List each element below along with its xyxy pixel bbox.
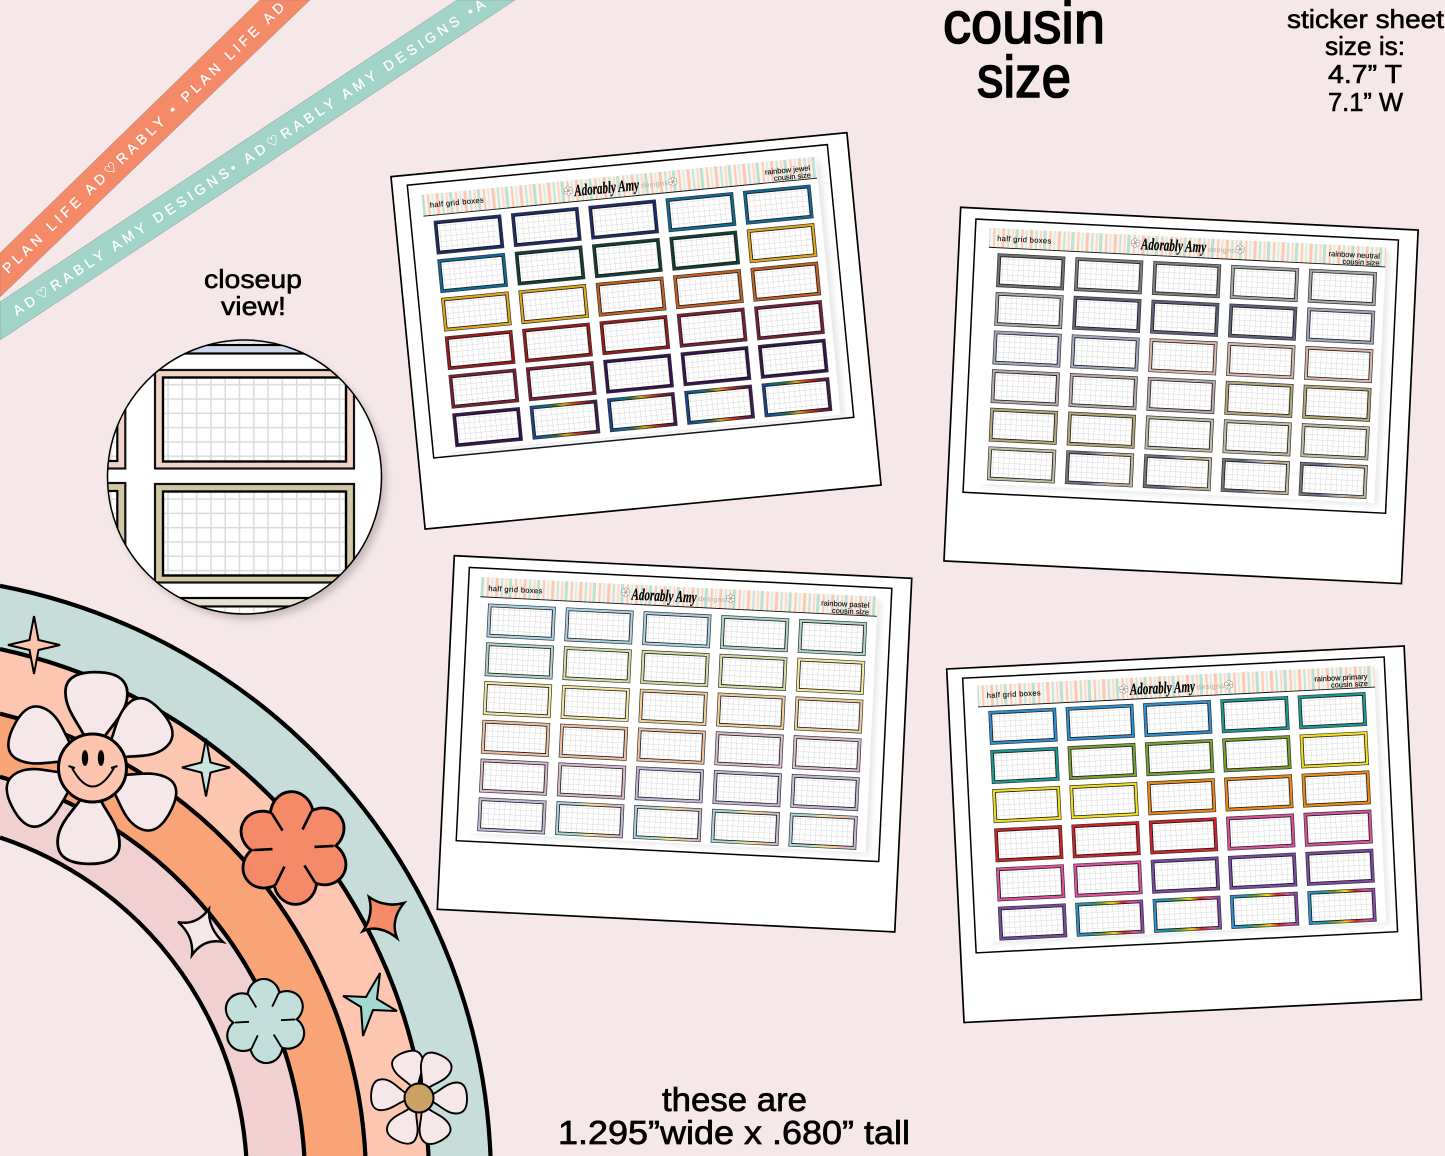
sticker grid [478,604,867,850]
text: sticker sheet size: size is: [1325,31,1405,61]
text: dimensions: 1.295”wide x .680” tall [558,1114,910,1151]
panel: rainbow pastel sheet [437,556,912,932]
label: rainbow neutral cousin size: cousin size [1342,257,1380,268]
icon: teal star [343,973,397,1036]
label: half grid boxes: half grid boxes [488,584,543,595]
text: closeup view [204,264,302,321]
label: half grid boxes: half grid boxes [997,234,1052,246]
icon: orange flower [233,790,354,906]
text: sticker sheet size: sticker sheet [1287,4,1445,34]
ribbon: adorably amy designs: AD♡RABLY AMY DESIGNS• AD♡RABLY AMY DESIGNS •A [10,0,488,319]
icon: mint flower [220,978,310,1064]
logo: Adorably Amy [1140,234,1207,257]
icon: small daisy [370,1048,467,1148]
label: rainbow neutral cousin size [1328,249,1380,268]
icon: white star [178,909,223,955]
text: sticker sheet size: 7.1” W [1328,87,1403,117]
title: cousin size: size [977,45,1071,110]
sticker grid [989,692,1376,940]
text: closeup view: view! [221,291,286,321]
label: rainbow primary cousin size: cousin size [1331,679,1368,690]
text: dimensions [558,1081,910,1151]
text: sticker sheet size: 4.7” T [1328,59,1402,89]
icon: smiley flower [0,671,184,865]
label: rainbow pastel cousin size: rainbow pastel [821,598,870,610]
logo: Adorably Amy [1129,677,1196,699]
label: rainbow primary cousin size [1314,672,1368,691]
closeup circle [106,339,390,622]
logo: designs [698,596,726,604]
logo: Adorably Amy [573,175,640,200]
label: half grid boxes: half grid boxes [987,688,1041,700]
ribbon: plan life adorably: PLAN LIFE AD♡RABLY • PLAN LIFE AD [0,0,287,276]
text: dimensions: these are [662,1081,807,1118]
sticker grid [987,254,1377,499]
panel: rainbow primary sheet [947,646,1421,1023]
label: half grid boxes: half grid boxes [429,195,484,210]
icon: orange star [363,897,404,938]
label: rainbow jewel cousin size: cousin size [773,170,811,183]
sticker grid [434,185,832,447]
icon: mint sparkle [182,738,230,796]
icon: peach sparkle [8,616,60,674]
label: rainbow jewel cousin size [764,163,812,184]
text: sticker sheet size [1287,4,1445,117]
logo: designs [1208,247,1236,255]
label: rainbow neutral cousin size: rainbow neutral [1328,249,1380,261]
label: rainbow primary cousin size: rainbow primary [1314,672,1368,684]
logo: Adorably Amy [631,584,697,607]
panel: rainbow neutral sheet [944,207,1418,584]
text: closeup view: closeup [204,264,302,294]
logo: designs [641,180,669,190]
label: rainbow pastel cousin size: cousin size [832,606,869,617]
rainbow [0,586,490,1156]
title: cousin size [943,0,1105,110]
panel: rainbow jewel sheet [391,133,881,529]
logo: designs [1197,683,1225,691]
label: rainbow jewel cousin size: rainbow jewel [764,163,811,177]
label: rainbow pastel cousin size [821,598,870,617]
